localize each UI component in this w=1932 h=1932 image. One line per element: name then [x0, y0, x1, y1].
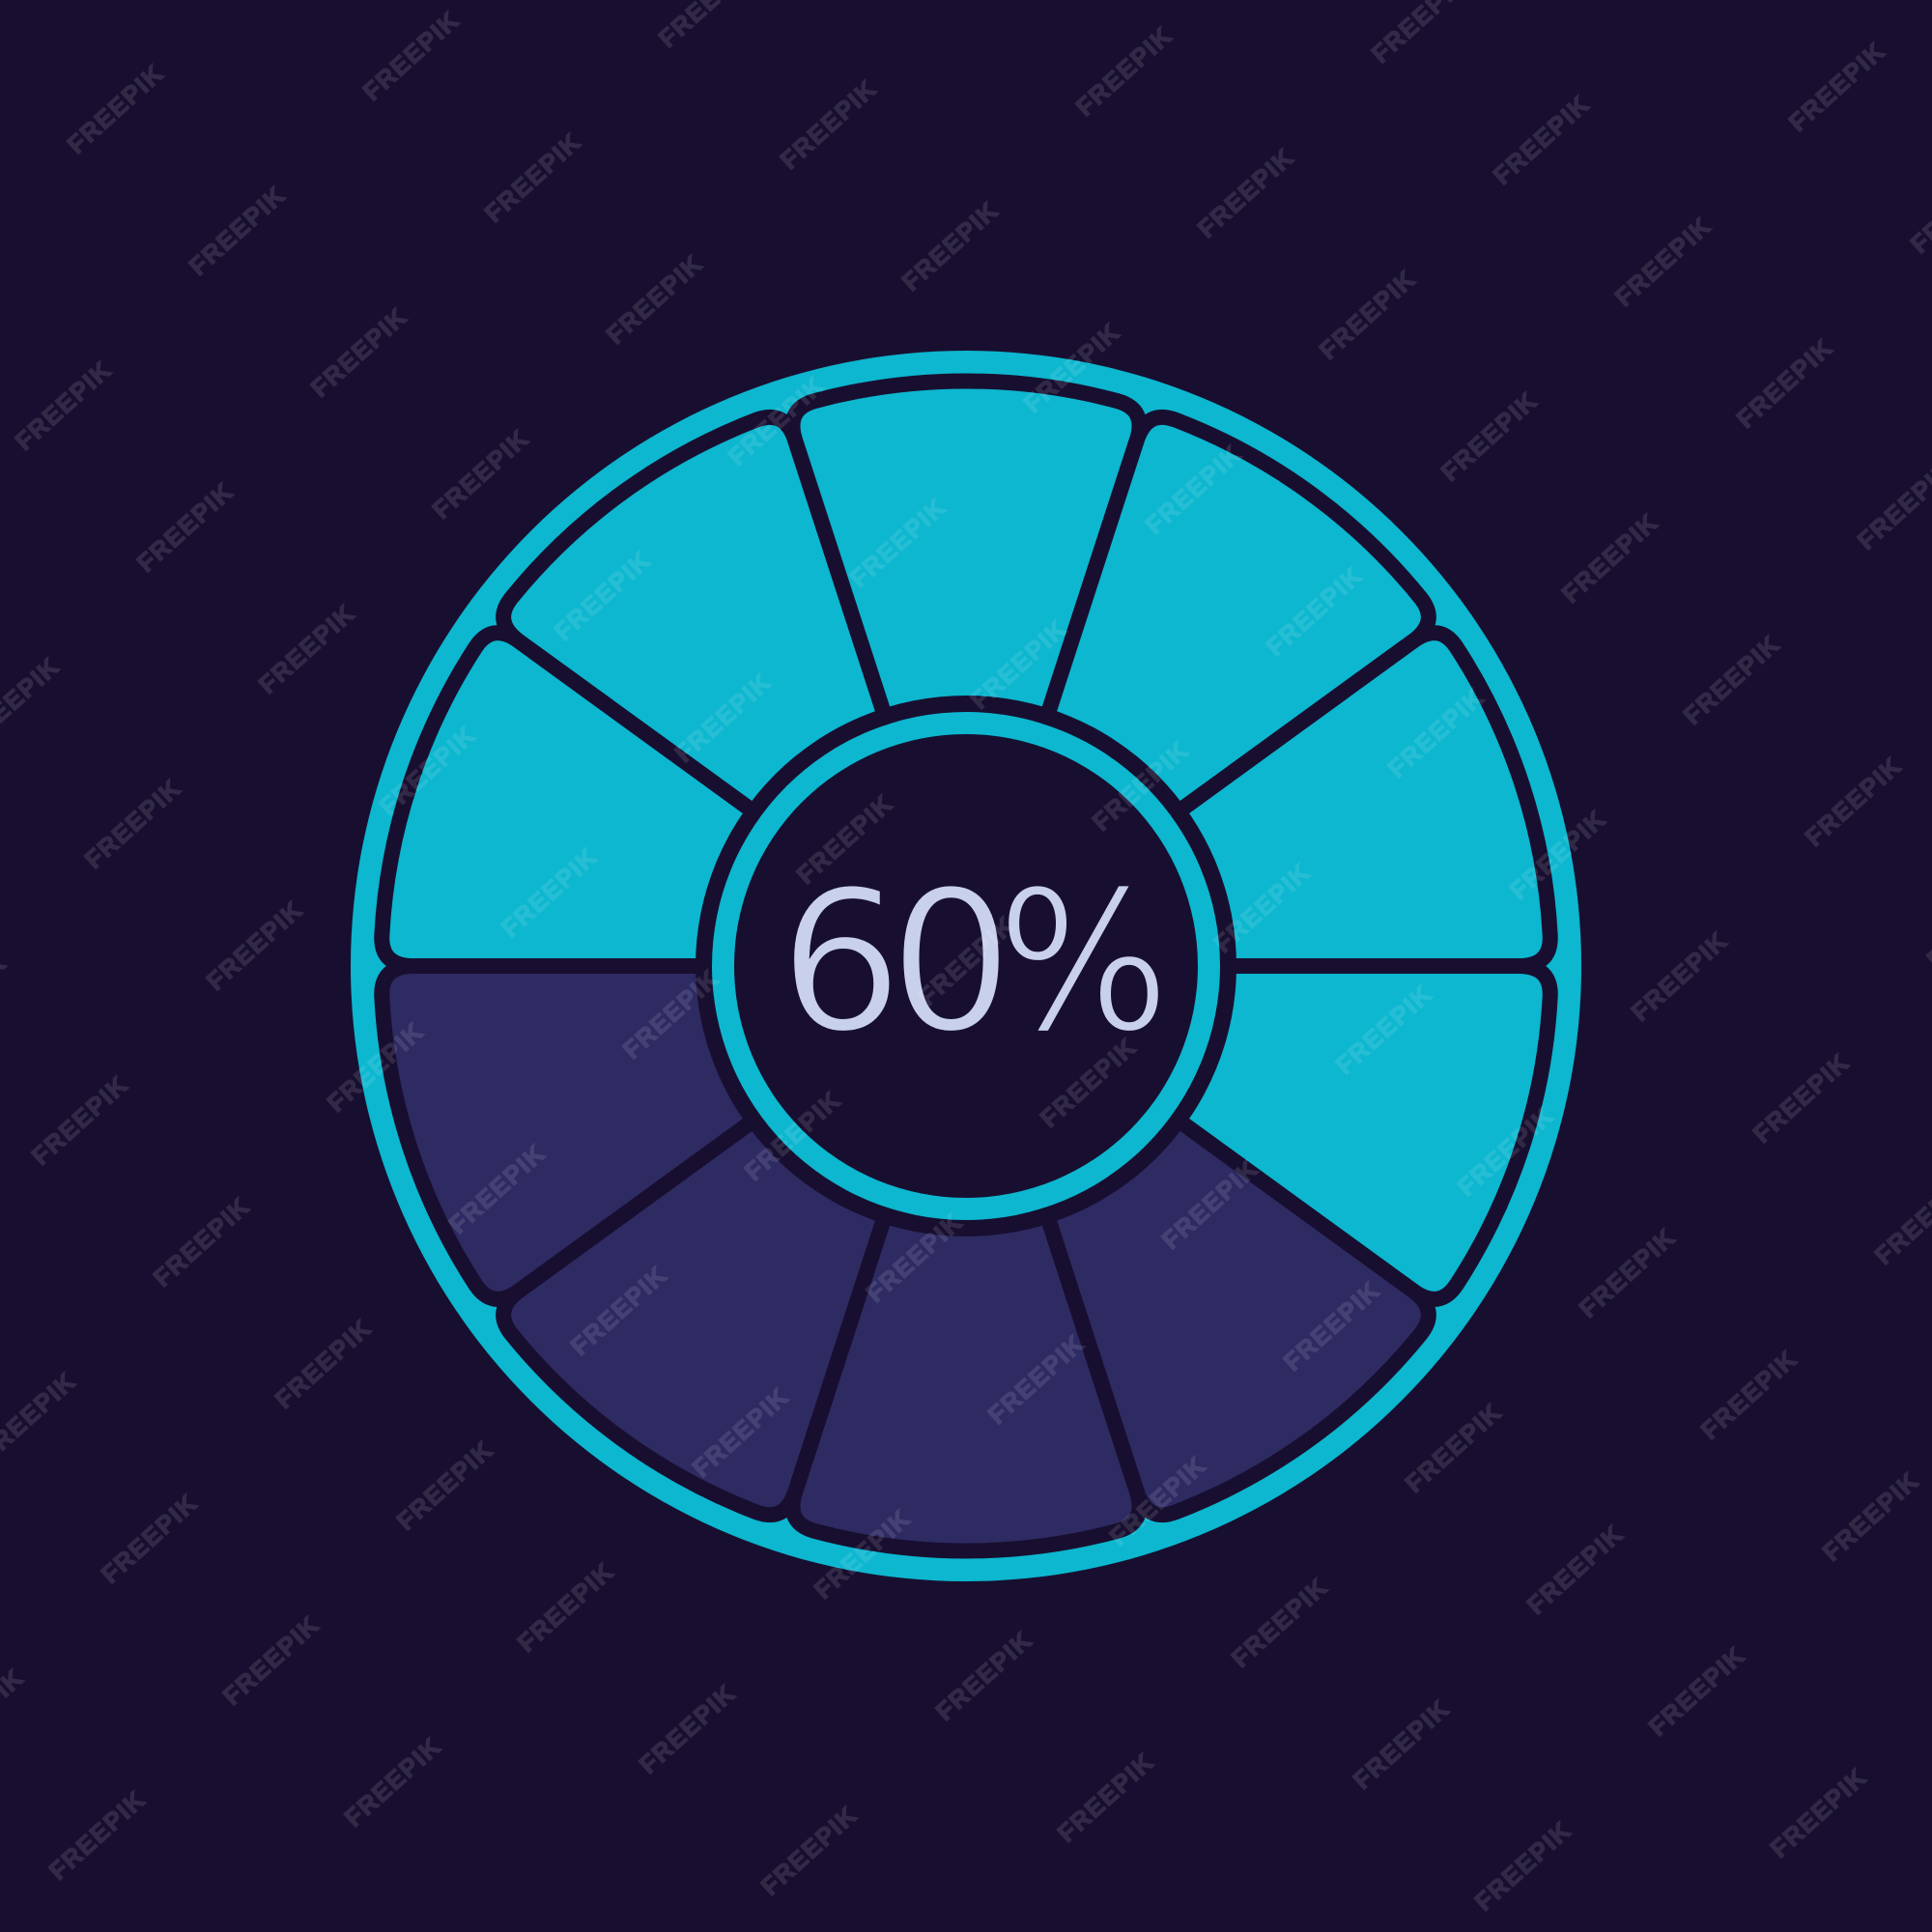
- watermark pattern: FREEPIK: [391, 1435, 498, 1536]
- watermark pattern: FREEPIK: [270, 1314, 377, 1414]
- segment: empty 3: [482, 1065, 960, 1541]
- watermark pattern: FREEPIK: [1140, 440, 1247, 540]
- watermark pattern: FREEPIK: [913, 911, 1020, 1011]
- watermark pattern: FREEPIK: [687, 1382, 794, 1483]
- watermark pattern: FREEPIK: [253, 599, 360, 699]
- watermark pattern: FREEPIK: [1330, 980, 1437, 1080]
- watermark pattern: FREEPIK: [427, 424, 534, 525]
- center percentage label: 60: [779, 848, 1013, 1076]
- watermark pattern: FREEPIK: [1261, 561, 1368, 662]
- watermark pattern: FREEPIK: [357, 6, 465, 106]
- chart: segmented progress wheel: [351, 351, 1581, 1581]
- watermark pattern: FREEPIK: [1488, 90, 1595, 190]
- watermark pattern: FREEPIK: [1765, 1763, 1872, 1863]
- watermark pattern: FREEPIK: [1192, 143, 1299, 243]
- watermark pattern: FREEPIK: [443, 1139, 551, 1239]
- center percentage label: %: [997, 848, 1170, 1076]
- segment: filled 4: [972, 391, 1450, 867]
- watermark pattern: FREEPIK: [791, 789, 898, 890]
- inner ring: [696, 696, 1236, 1236]
- watermark pattern: FREEPIK: [1800, 752, 1907, 852]
- segment: filled 3: [793, 381, 1139, 717]
- segment: filled 6: [1150, 878, 1576, 1312]
- watermark pattern: FREEPIK: [1731, 333, 1838, 434]
- outer ring: [351, 351, 1581, 1581]
- watermark pattern: FREEPIK: [1104, 1451, 1211, 1551]
- watermark pattern: FREEPIK: [1817, 1466, 1924, 1567]
- watermark pattern: FREEPIK: [479, 128, 586, 228]
- segment: filled 5: [1150, 620, 1576, 1054]
- watermark pattern: FREEPIK: [1052, 1747, 1159, 1848]
- segment: empty 4: [356, 878, 782, 1312]
- watermark pattern: FREEPIK: [512, 1557, 619, 1658]
- watermark pattern: FREEPIK: [1695, 1345, 1803, 1445]
- watermark pattern: FREEPIK: [809, 1504, 916, 1605]
- watermark pattern: FREEPIK: [617, 964, 724, 1065]
- watermark pattern: FREEPIK: [79, 774, 186, 874]
- watermark pattern: FREEPIK: [1469, 1816, 1577, 1917]
- watermark pattern: FREEPIK: [1087, 736, 1194, 837]
- watermark pattern: FREEPIK: [601, 249, 708, 350]
- watermark pattern: FREEPIK: [930, 1626, 1037, 1726]
- watermark pattern: FREEPIK: [896, 196, 1004, 297]
- watermark pattern: FREEPIK: [1574, 1223, 1681, 1323]
- watermark pattern: FREEPIK: [1556, 508, 1663, 609]
- watermark pattern: FREEPIK: [496, 842, 603, 943]
- watermark pattern: FREEPIK: [217, 1610, 325, 1711]
- watermark pattern: FREEPIK: [965, 614, 1072, 715]
- segment: filled 1: [356, 620, 782, 1054]
- watermark pattern: FREEPIK: [1609, 212, 1717, 312]
- watermark pattern: FREEPIK: [739, 1086, 846, 1186]
- watermark pattern: FREEPIK: [26, 1070, 133, 1171]
- watermark pattern: FREEPIK: [96, 1489, 203, 1589]
- watermark pattern: FREEPIK: [184, 181, 291, 281]
- watermark pattern: FREEPIK: [131, 477, 239, 578]
- watermark pattern: FREEPIK: [982, 1329, 1090, 1430]
- watermark pattern: FREEPIK: [201, 895, 308, 996]
- watermark pattern: FREEPIK: [148, 1192, 255, 1293]
- segment: empty 1: [972, 1065, 1450, 1541]
- watermark pattern: FREEPIK: [1208, 858, 1316, 958]
- segment: filled 2: [482, 391, 960, 867]
- watermark pattern: FREEPIK: [1435, 386, 1543, 487]
- watermark pattern: FREEPIK: [322, 1017, 429, 1118]
- watermark pattern: FREEPIK: [1226, 1573, 1333, 1673]
- watermark pattern: FREEPIK: [669, 668, 777, 768]
- watermark pattern: FREEPIK: [1035, 1033, 1142, 1133]
- watermark pattern: FREEPIK: [1643, 1641, 1750, 1742]
- watermark pattern: FREEPIK: [549, 546, 656, 646]
- watermark pattern: FREEPIK: [1278, 1276, 1385, 1377]
- watermark pattern: FREEPIK: [775, 74, 882, 175]
- watermark pattern: FREEPIK: [43, 1785, 151, 1886]
- watermark pattern: FREEPIK: [10, 355, 117, 456]
- watermark pattern: FREEPIK: [374, 721, 481, 821]
- watermark pattern: FREEPIK: [1018, 318, 1125, 418]
- watermark pattern: FREEPIK: [1314, 265, 1421, 365]
- watermark pattern: FREEPIK: [1400, 1398, 1507, 1498]
- watermark pattern: FREEPIK: [634, 1679, 741, 1779]
- watermark pattern: FREEPIK: [723, 371, 830, 471]
- watermark pattern: FREEPIK: [1521, 1520, 1629, 1620]
- watermark pattern: FREEPIK: [1348, 1694, 1455, 1795]
- watermark pattern: FREEPIK: [1678, 630, 1785, 730]
- watermark pattern: FREEPIK: [62, 59, 169, 159]
- watermark pattern: FREEPIK: [305, 302, 412, 403]
- watermark pattern: FREEPIK: [861, 1208, 968, 1308]
- watermark pattern: FREEPIK: [1070, 21, 1178, 122]
- watermark pattern: FREEPIK: [1504, 805, 1611, 905]
- watermark pattern: FREEPIK: [1783, 37, 1890, 137]
- watermark pattern: FREEPIK: [844, 493, 952, 593]
- watermark pattern: FREEPIK: [1452, 1101, 1559, 1202]
- watermark pattern: FREEPIK: [1747, 1048, 1855, 1149]
- watermark pattern: FREEPIK: [339, 1732, 446, 1833]
- watermark pattern: FREEPIK: [1156, 1154, 1264, 1255]
- watermark pattern: FREEPIK: [755, 1801, 863, 1901]
- watermark pattern: FREEPIK: [1626, 926, 1733, 1027]
- watermark pattern: FREEPIK: [565, 1261, 672, 1361]
- watermark pattern: FREEPIK: [1382, 683, 1490, 783]
- segment: empty 2: [793, 1215, 1139, 1551]
